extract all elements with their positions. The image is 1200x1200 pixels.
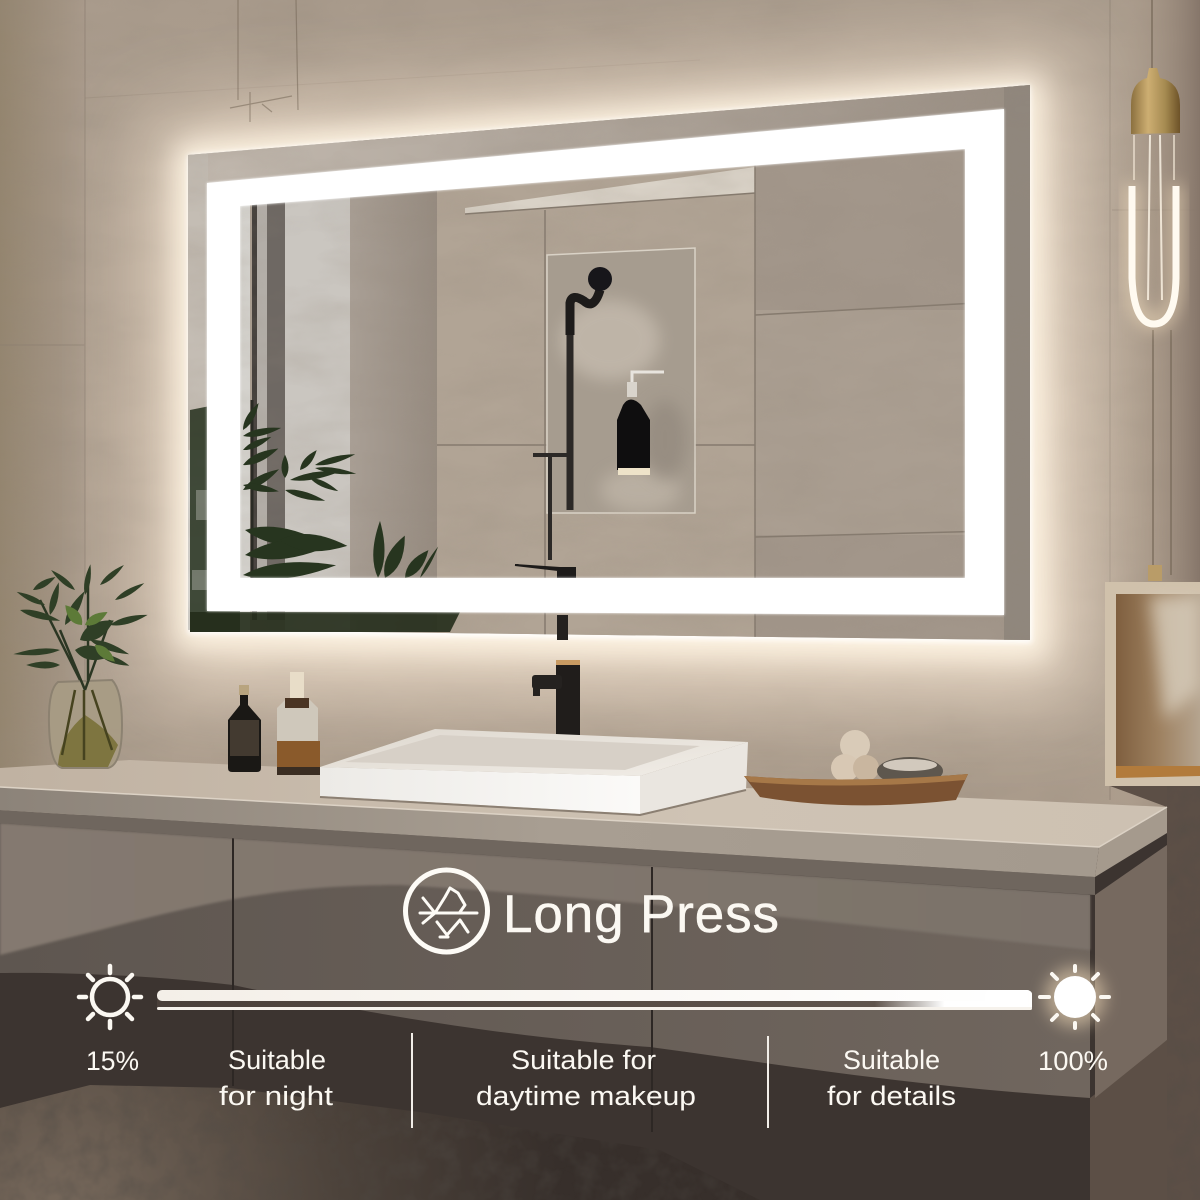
brightness slider bar bbox=[157, 990, 1032, 1010]
wall niche bbox=[1105, 565, 1200, 786]
label: 100%: 100% bbox=[1038, 1046, 1108, 1076]
long press heading bbox=[406, 870, 779, 952]
icon: long press hand in circle bbox=[406, 870, 488, 952]
label: suitable for details bbox=[827, 1045, 956, 1111]
icon: dim sun bbox=[79, 966, 141, 1028]
heading text: Long Press bbox=[503, 885, 779, 944]
label: suitable for details: Suitable bbox=[843, 1045, 940, 1075]
LED mirror bbox=[180, 80, 1040, 650]
label: suitable for details: for details bbox=[827, 1081, 956, 1111]
label: suitable for daytime makeup bbox=[476, 1045, 696, 1111]
faucet reflection stem bbox=[557, 615, 568, 640]
amber bottle bbox=[277, 672, 320, 775]
label: suitable for daytime makeup: daytime makeup bbox=[476, 1081, 696, 1111]
wire hooks at upper left bbox=[230, 0, 298, 122]
label: suitable for night: for night bbox=[219, 1081, 334, 1111]
LED light band bbox=[207, 109, 1004, 615]
dark cabinet surroundings bbox=[0, 786, 1200, 1200]
vase plant bbox=[13, 563, 149, 768]
cabinet bbox=[0, 810, 1167, 1132]
reflected shower panel bbox=[515, 248, 695, 578]
tray with soap and dish bbox=[744, 730, 968, 805]
icon: bright sun bbox=[1040, 966, 1109, 1028]
faucet bbox=[532, 660, 580, 737]
countertop bbox=[0, 760, 1167, 877]
wall background bbox=[0, 0, 1200, 815]
label: suitable for night: Suitable bbox=[228, 1045, 326, 1075]
label: suitable for night bbox=[219, 1045, 334, 1111]
sink bbox=[320, 729, 748, 815]
label: suitable for daytime makeup: Suitable for bbox=[511, 1045, 656, 1075]
mirror backlight glow bbox=[150, 0, 1200, 815]
pendant lamp bbox=[1131, 0, 1180, 575]
label: 15%: 15% bbox=[86, 1046, 139, 1076]
brightness scale bbox=[79, 966, 1109, 1128]
floor bbox=[0, 1085, 460, 1200]
mirror glass reflection bbox=[180, 80, 1040, 650]
reflected plant bbox=[190, 400, 460, 632]
dark bottle bbox=[228, 685, 261, 772]
